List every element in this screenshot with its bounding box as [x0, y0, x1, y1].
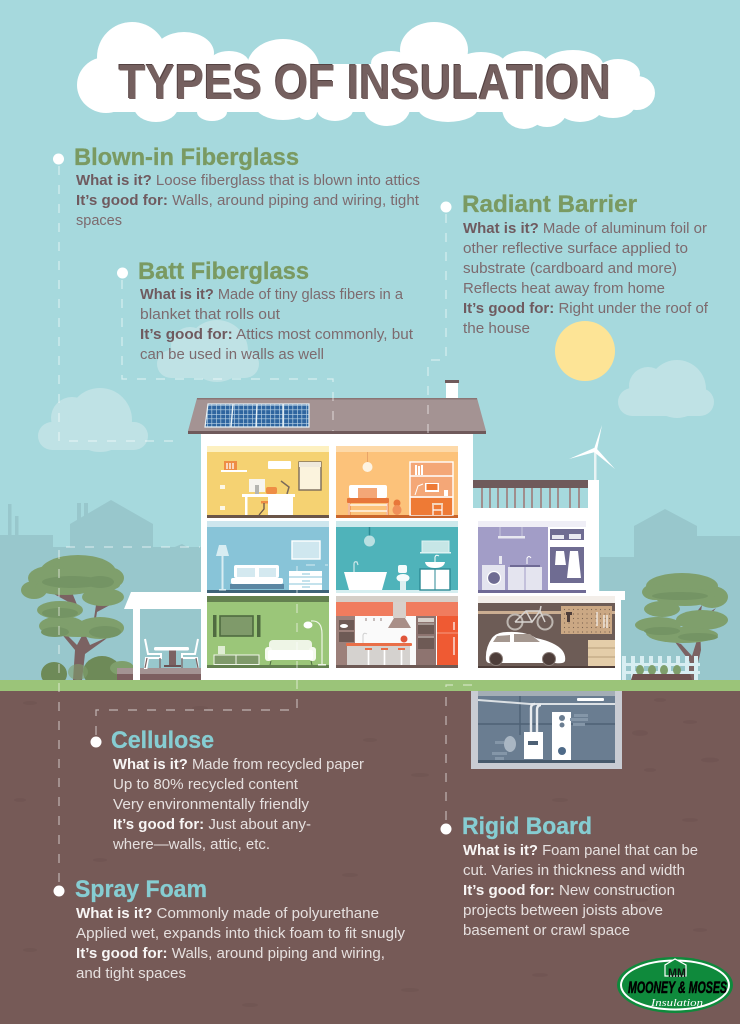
room: living room [207, 596, 329, 668]
bicycle [508, 606, 552, 630]
block: spray foam: It’s good for: Walls, around piping and wiring, [76, 946, 385, 962]
right tree [635, 573, 728, 680]
block: batt fiberglass: What is it? Made of tiny glass fibers in a [140, 287, 404, 303]
leader line: rigid board [446, 685, 475, 820]
block: radiant barrier: substrate (cardboard and more) [463, 261, 677, 277]
block: rigid board: basement or crawl space [463, 923, 630, 939]
car [486, 632, 565, 666]
block: batt fiberglass: blanket that rolls out [140, 307, 280, 323]
block: rigid board: What is it? Foam panel that can be [463, 843, 698, 859]
house body [201, 430, 621, 680]
block: cellulose: Cellulose [111, 727, 214, 754]
block: rigid board: projects between joists above [463, 903, 663, 919]
sun [555, 321, 615, 381]
block: batt fiberglass [117, 258, 413, 363]
block: radiant barrier: Reflects heat away from home [463, 281, 665, 297]
small cloud behind batt text [157, 320, 259, 382]
block: cellulose: It’s good for: Just about any- [113, 817, 311, 833]
block: blown-in fiberglass: It’s good for: Walls, around piping and wiring, tight [76, 193, 419, 209]
block: cellulose: Up to 80% recycled content [113, 777, 298, 793]
block: cellulose [90, 727, 364, 853]
block: radiant barrier [440, 191, 709, 337]
room: master bedroom [207, 521, 329, 593]
block: blown-in fiberglass [53, 144, 420, 229]
block: batt fiberglass: Batt Fiberglass [138, 258, 309, 285]
leader line: blown-in fiberglass [59, 166, 175, 441]
block: rigid board: cut. Varies in thickness and width [463, 863, 685, 879]
small cloud right [618, 360, 714, 418]
logo: mooney and moses insulation: Insulation [650, 997, 704, 1009]
block: radiant barrier: Radiant Barrier [462, 191, 637, 218]
block: cellulose: What is it? Made from recycled paper [113, 757, 364, 773]
grass [0, 680, 740, 691]
leader line: batt fiberglass [122, 280, 333, 431]
solar panels [205, 404, 309, 427]
chimney [445, 380, 459, 399]
leader line: radiant barrier [428, 214, 446, 435]
leader line: cellulose [96, 565, 328, 735]
block: spray foam: Spray Foam [75, 876, 207, 903]
block: blown-in fiberglass: spaces [76, 213, 122, 229]
garden bed [631, 665, 692, 680]
block: rigid board [440, 813, 698, 939]
block: rigid board: Rigid Board [462, 813, 592, 840]
block: radiant barrier: other reflective surface applied to [463, 241, 688, 257]
room: bedroom [336, 446, 458, 518]
block: cellulose: Very environmentally friendly [113, 797, 310, 813]
basement [471, 691, 622, 769]
roof [188, 398, 486, 434]
picket fence [622, 656, 700, 680]
room: office [207, 446, 329, 518]
leader line: spray foam [59, 547, 200, 882]
block: spray foam [54, 876, 406, 982]
block: radiant barrier: What is it? Made of aluminum foil or [463, 221, 707, 237]
block: blown-in fiberglass: What is it? Loose fiberglass that is blown into attics [76, 173, 420, 189]
block: spray foam: What is it? Commonly made of polyurethane [76, 906, 379, 922]
wind turbine [569, 425, 615, 482]
patio pergola [117, 592, 202, 680]
sky background [0, 0, 740, 691]
small cloud left [38, 388, 148, 452]
distant skyline [0, 500, 740, 687]
left tree [21, 555, 134, 688]
title cloud [77, 22, 655, 129]
soil speckles [14, 698, 719, 1007]
block: batt fiberglass: can be used in walls as well [140, 347, 324, 363]
room: bathroom [336, 521, 458, 593]
block: spray foam: and tight spaces [76, 966, 186, 982]
garage [478, 591, 625, 668]
title: TYPES OF INSULATION [119, 56, 611, 110]
terrace railing [473, 480, 588, 508]
soil [0, 691, 740, 1024]
block: radiant barrier: It’s good for: Right under the roof of [463, 301, 709, 317]
block: rigid board: It’s good for: New construction [463, 883, 675, 899]
block: radiant barrier: the house [463, 321, 530, 337]
block: cellulose: where—walls, attic, etc. [112, 837, 270, 853]
block: blown-in fiberglass: Blown-in Fiberglass [74, 144, 299, 171]
block: spray foam: Applied wet, expands into thick foam to fit snugly [76, 926, 406, 942]
block: batt fiberglass: It’s good for: Attics most commonly, but [140, 327, 413, 343]
logo: mooney and moses insulation [617, 957, 733, 1013]
logo: mooney and moses insulation: MM [668, 966, 686, 980]
room: kitchen [336, 596, 458, 668]
room: laundry [478, 521, 586, 593]
